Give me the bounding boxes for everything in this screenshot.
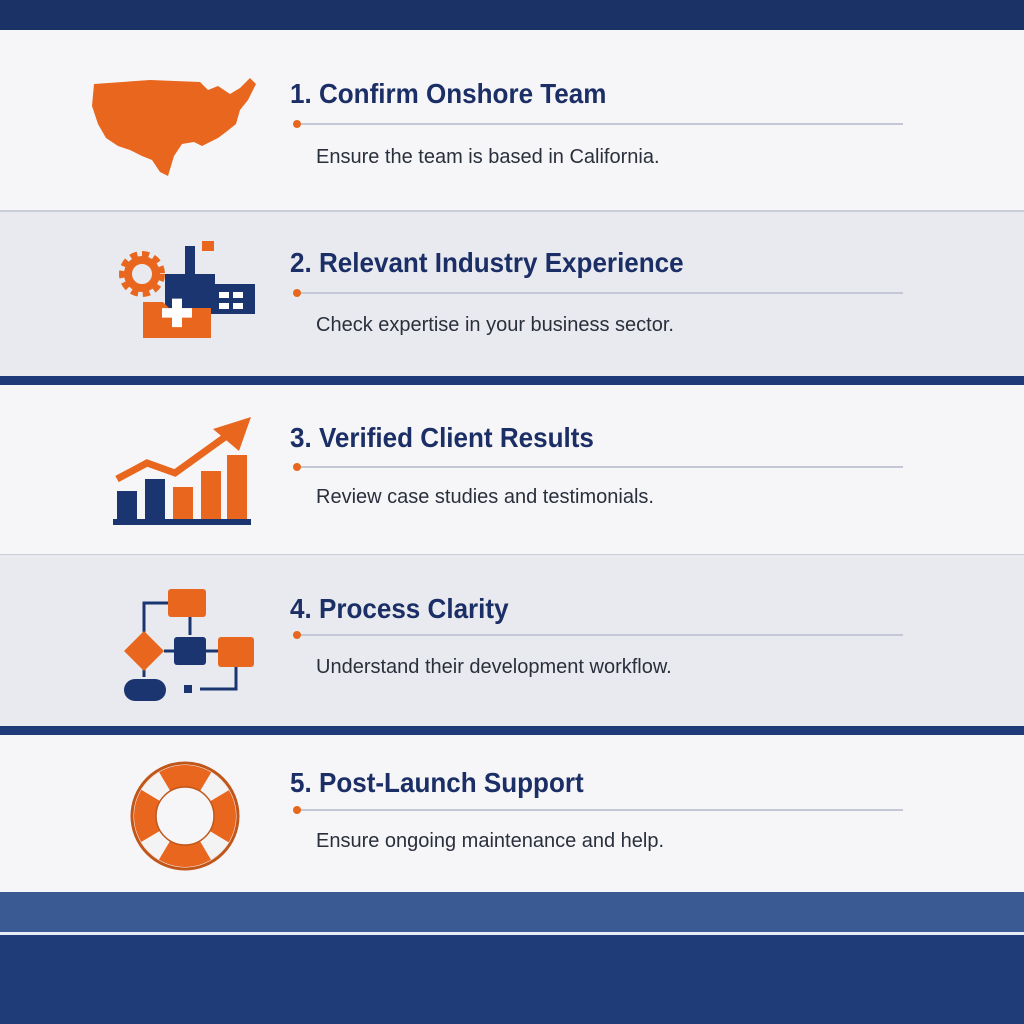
icon: life ring — [130, 762, 240, 870]
title 4: 4. Process Clarity — [290, 593, 509, 624]
desc 4: Understand their development workflow. — [316, 656, 672, 678]
desc 3: Review case studies and testimonials. — [316, 486, 654, 508]
panel 5 — [0, 735, 1024, 892]
panel 4 — [0, 555, 1024, 726]
desc 1: Ensure the team is based in California. — [316, 146, 660, 168]
stripe — [0, 376, 1024, 385]
icon: US map — [92, 78, 256, 176]
desc 2: Check expertise in your business sector. — [316, 314, 674, 336]
bottom band — [0, 892, 1024, 932]
panel 2 — [0, 212, 1024, 376]
title 3: 3. Verified Client Results — [290, 422, 594, 453]
title 1: 1. Confirm Onshore Team — [290, 78, 606, 109]
desc 5: Ensure ongoing maintenance and help. — [316, 830, 664, 852]
panel 1 — [0, 30, 1024, 210]
stripe — [0, 726, 1024, 735]
title 2: 2. Relevant Industry Experience — [290, 247, 684, 278]
icon: flowchart — [124, 589, 254, 701]
top band — [0, 0, 1024, 30]
icon: growth chart — [113, 417, 251, 525]
icon: industry — [119, 241, 255, 338]
title 5: 5. Post-Launch Support — [290, 767, 584, 798]
panel 3 — [0, 385, 1024, 554]
